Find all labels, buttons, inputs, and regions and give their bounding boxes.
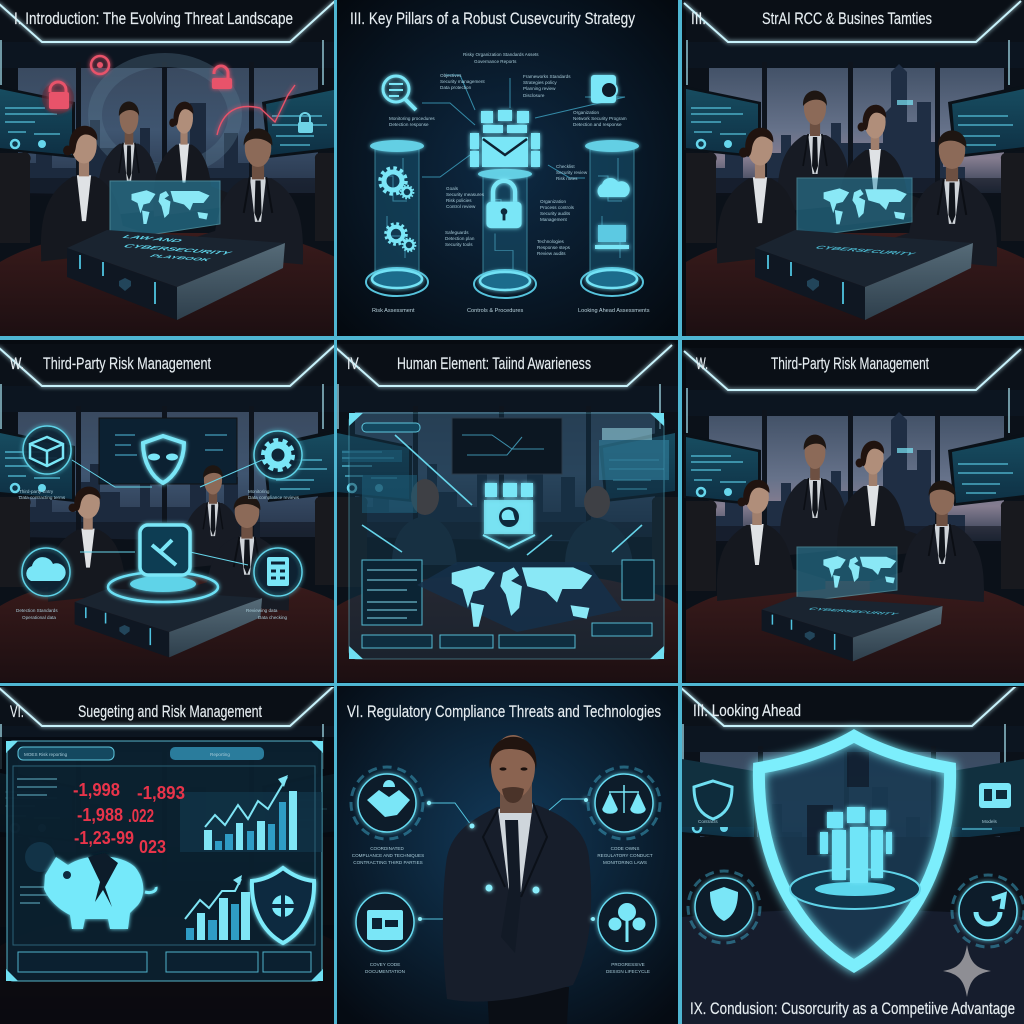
title: III. — [691, 10, 706, 28]
small pillar captions and notes: Organization — [540, 199, 566, 204]
icon: brick shield and envelope — [470, 110, 540, 167]
bar chart: lower — [185, 875, 250, 940]
sparkle watermark — [943, 945, 991, 997]
red figures: -1,893 — [137, 783, 185, 803]
book: LAW AND — [119, 234, 185, 244]
small pillar captions and notes: Organization — [573, 110, 599, 115]
hotspots — [418, 798, 595, 921]
panel: IV. Human Element — [337, 342, 678, 682]
small pillar captions and notes: Monitoring procedures — [389, 116, 435, 121]
ring icon: shield — [688, 871, 760, 943]
title: Third-Party Risk Management — [771, 355, 929, 373]
small pillar captions and notes: Strategies policy — [523, 80, 557, 85]
small captions — [16, 489, 300, 620]
title: W. — [10, 355, 24, 373]
red figures — [73, 780, 185, 857]
book — [762, 597, 943, 661]
title: Human Element: Taiind Awarieness — [397, 355, 591, 373]
small pillar captions and notes — [372, 52, 650, 314]
small pillar captions and notes: Security audits — [540, 211, 571, 216]
icon: broken piggy bank — [44, 853, 156, 929]
icon: gears — [380, 168, 416, 252]
small pillar captions and notes: Risk policies — [446, 198, 472, 203]
small pillar captions and notes: Disclosure — [523, 93, 545, 98]
icon: cloud and laptop — [595, 178, 630, 249]
panel: V. Third-Party Risk Management holographic — [0, 342, 334, 682]
side monitors and icons — [682, 759, 1024, 827]
small pillar captions and notes: Process controls — [540, 205, 575, 210]
captions: COMPLIANCE AND TECHNIQUES — [352, 853, 424, 858]
connector lines — [422, 75, 625, 178]
title — [347, 355, 591, 373]
small pillar captions and notes: Risk notes — [556, 176, 578, 181]
red figures: -1,23-99 — [74, 828, 134, 848]
small captions: Operational data — [22, 615, 56, 620]
monitor: shield mask — [99, 418, 237, 484]
captions: PROGRESSIVE — [611, 962, 645, 967]
connector lines — [421, 799, 593, 919]
panel: VI. Regulatory Compliance — [337, 687, 678, 1024]
icon: tree — [598, 893, 656, 951]
small pillar captions and notes: Management — [540, 217, 568, 222]
book — [755, 230, 973, 320]
small pillar captions and notes: Goals — [446, 186, 459, 191]
small pillar captions and notes: Detection and response — [573, 122, 622, 127]
dashboard frame — [6, 741, 323, 981]
pillars — [366, 140, 643, 298]
red threat icons — [42, 56, 295, 135]
small captions: Data checking — [258, 615, 288, 620]
hologram map — [110, 181, 220, 241]
panel: I. Introduction — [0, 0, 334, 336]
captions: COVEY CODE — [370, 962, 400, 967]
book: CYBERSECURITY — [806, 607, 901, 616]
small pillar captions and notes: Security review — [556, 170, 588, 175]
captions: COORDINATED — [370, 846, 404, 851]
hologram map — [797, 547, 897, 602]
side monitors and icons: Models — [982, 819, 998, 824]
big glowing shield — [759, 736, 950, 966]
red figures: 023 — [139, 837, 166, 857]
title: Third-Party Risk Management — [43, 355, 211, 373]
icon: handshake — [351, 767, 423, 839]
small pillar captions and notes: Controls & Procedures — [467, 308, 523, 314]
dashboard frame: Reporting — [210, 752, 230, 757]
small pillar captions and notes: Frameworks Standards — [523, 74, 571, 79]
translucent dashboard — [342, 413, 669, 659]
panel: V. Third-Party Risk Management — [682, 346, 1024, 682]
title: StrAI RCC & Busines Tamties — [762, 10, 932, 28]
book: PLAYBOOK — [147, 254, 213, 262]
panel: IX. Conclusion — [682, 687, 1024, 1024]
small captions: Reviewing data — [246, 608, 278, 613]
hologram map — [797, 178, 912, 238]
icon: magnifier — [383, 76, 416, 110]
captions: MONITORING LAWS — [603, 860, 647, 865]
small pillar captions and notes: Planning review — [523, 86, 556, 91]
captions — [352, 846, 653, 974]
small pillar captions and notes: Control review — [446, 204, 476, 209]
captions: DESIGN LIFECYCLE — [606, 969, 650, 974]
person — [443, 735, 591, 1024]
panel: III. Strategy and Business — [682, 0, 1024, 336]
people — [717, 435, 984, 602]
red figures: -1,998 — [73, 780, 120, 800]
title: IV. — [347, 355, 361, 373]
small pillar captions and notes: Governance Reports — [474, 59, 517, 64]
small pillar captions and notes: Security management — [440, 79, 485, 84]
title: VI. — [10, 703, 24, 721]
small pillar captions and notes: Detection plan — [445, 236, 475, 241]
diagonal data lines — [362, 435, 642, 555]
title — [696, 355, 929, 373]
small pillar captions and notes: Data protection — [440, 85, 472, 90]
icon: document — [356, 893, 414, 951]
small captions: Third-party Entry — [19, 489, 54, 494]
small captions: Detection Standards — [16, 608, 58, 613]
small pillar captions and notes: Response steps — [537, 245, 571, 250]
people — [41, 101, 303, 264]
book — [67, 230, 285, 320]
small pillar captions and notes: Network Security Program — [573, 116, 627, 121]
title: W. — [696, 355, 708, 373]
people — [717, 91, 997, 266]
title — [691, 10, 932, 28]
people — [48, 465, 289, 611]
heading: looking ahead: III. Looking Ahead — [693, 702, 801, 720]
small pillar captions and notes: Safeguards — [445, 230, 469, 235]
panel: II. Key Pillars — [337, 0, 678, 336]
connector lines — [72, 460, 262, 565]
bar chart: upper — [204, 775, 297, 850]
ring icon: arrow — [952, 875, 1024, 947]
icon: padlock — [486, 181, 522, 228]
icon: shield — [252, 868, 314, 943]
red figures: .022 — [128, 806, 154, 826]
small pillar captions and notes: Technologies — [537, 239, 565, 244]
captions: CONTRACTING THIRD PARTIES — [353, 860, 423, 865]
book: CYBERSECURITY — [120, 243, 235, 256]
small captions: Data compliance reviews — [248, 495, 300, 500]
title — [10, 355, 211, 373]
faces — [392, 479, 633, 565]
icon: scales — [588, 767, 660, 839]
small captions: Data contracting terms — [19, 495, 66, 500]
central lock hologram — [108, 525, 218, 602]
holographic ring icons — [22, 426, 302, 596]
captions: DOCUMENTATION — [365, 969, 405, 974]
panel: VI. Budgeting and Risk Management — [0, 687, 334, 982]
world map — [417, 562, 622, 632]
book: CYBERSECURITY — [812, 245, 918, 257]
dashboard frame: MOES Risk reporting — [24, 752, 68, 757]
small pillar captions and notes: Security measures — [446, 192, 485, 197]
side monitors and icons: Contracts — [698, 819, 718, 824]
book — [75, 588, 262, 657]
small pillar captions and notes: Objectives — [440, 73, 462, 78]
captions: REGULATORY CONDUCT — [597, 853, 653, 858]
title: Suegeting and Risk Management — [78, 703, 262, 721]
small captions: Monitoring — [248, 489, 270, 494]
small pillar captions and notes: Security tools — [445, 242, 473, 247]
central shield icon — [483, 483, 535, 548]
small pillar captions and notes: Detection response — [389, 122, 429, 127]
title — [10, 703, 262, 721]
small pillar captions and notes: Looking Ahead Assessments — [578, 308, 650, 314]
small pillar captions and notes: Checklist — [556, 164, 575, 169]
small pillar captions and notes: Review audits — [537, 251, 566, 256]
captions: CODE OWNS — [611, 846, 639, 851]
small pillar captions and notes: Risk Assessment — [372, 308, 415, 314]
red figures: -1,988 — [77, 805, 123, 825]
small pillar captions and notes: Risky Organization Standards Assets — [463, 52, 539, 57]
icon: device — [591, 75, 617, 103]
